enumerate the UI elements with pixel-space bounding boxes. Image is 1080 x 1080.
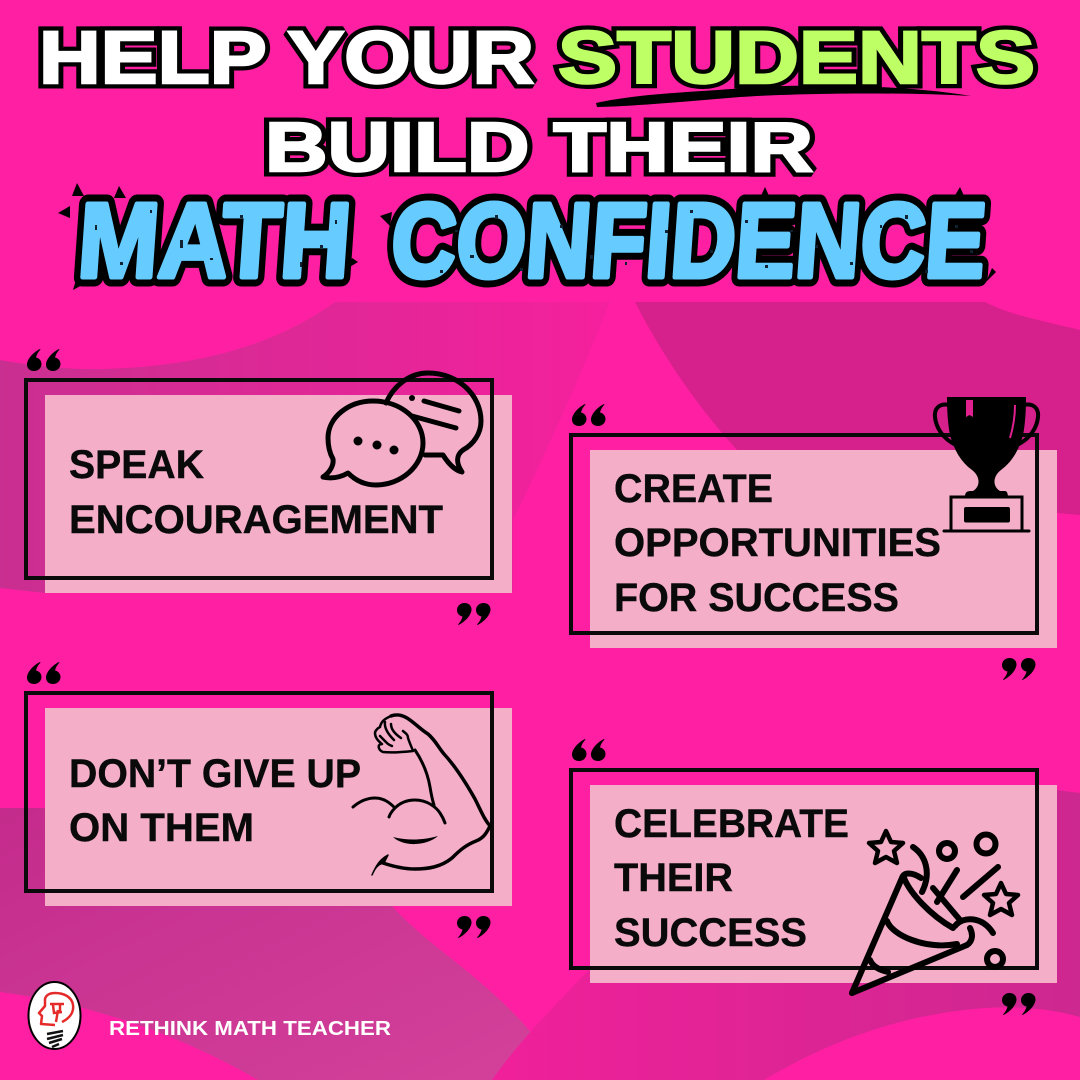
title line 3: math confidence: CONFIDENCE [388,182,990,300]
card text: THEIR [614,856,733,900]
opening quote second mark [46,349,60,371]
title line 3: math confidence: MATH [75,182,355,300]
panel: create opportunities [571,397,1057,680]
title [39,16,1035,300]
card text [69,752,361,850]
card text: DON’T GIVE UP [69,752,361,796]
opening quote second mark [591,404,606,426]
card text: SPEAK [69,443,204,487]
opening quote second mark [46,662,60,684]
footer brand [28,982,392,1049]
closing quote [457,916,472,938]
brand name: RETHINK MATH TEACHER [109,1018,392,1040]
card background [45,395,512,593]
card text: CELEBRATE [614,802,849,846]
card text [614,802,849,955]
opening quote [27,349,42,371]
background shape: bottom right [492,790,1080,1080]
background shape: bottom left [0,808,561,1080]
brush underline [596,85,971,107]
title line 2: BUILD THEIR [265,108,813,186]
logo: bulb head [28,982,80,1049]
title line 1: HELP YOUR [39,16,534,99]
title line 2: BUILD THEIR [265,108,813,186]
closing quote [457,603,472,625]
closing quote [1002,658,1016,680]
grunge specks [95,210,973,273]
panel: speak encouragement [26,349,512,625]
spikes [58,183,996,290]
panel: don't give up [26,662,512,938]
opening quote [572,404,586,426]
closing quote second mark [1021,993,1036,1015]
card text [69,443,443,542]
panel: celebrate their success [571,739,1057,1015]
icon: party popper [852,831,1018,993]
card frame [26,380,492,578]
closing quote second mark [1021,658,1036,680]
background shape: top left [0,302,610,593]
title line 1 [39,16,1035,99]
card text [614,467,941,620]
closing quote second mark [476,603,490,625]
card frame [26,693,492,891]
card frame [571,435,1037,633]
title line 3: math confidence: MATH [75,182,355,300]
title line 1: STUDENTS [558,16,1035,99]
card text: ON THEM [69,806,254,850]
card text: OPPORTUNITIES [614,521,941,565]
opening quote [27,662,42,684]
title line 3: math confidence: CONFIDENCE [388,182,990,300]
opening quote second mark [591,739,606,761]
card background [45,708,512,906]
closing quote [1002,993,1016,1015]
card text: CREATE [614,467,773,511]
card background [590,450,1057,648]
background shape: top right [635,302,1080,520]
title line 1: STUDENTS [558,16,1035,99]
icon: speech bubbles [323,373,481,485]
card frame [571,770,1037,968]
card text: ENCOURAGEMENT [69,498,443,542]
closing quote second mark [476,916,490,938]
title line 3: math confidence [58,182,996,300]
card text: SUCCESS [614,911,807,955]
icon: flexed arm [353,715,490,875]
card text: FOR SUCCESS [614,576,899,620]
title line 1: HELP YOUR [39,16,534,99]
opening quote [572,739,586,761]
icon: trophy [935,397,1038,531]
card background [590,785,1057,983]
